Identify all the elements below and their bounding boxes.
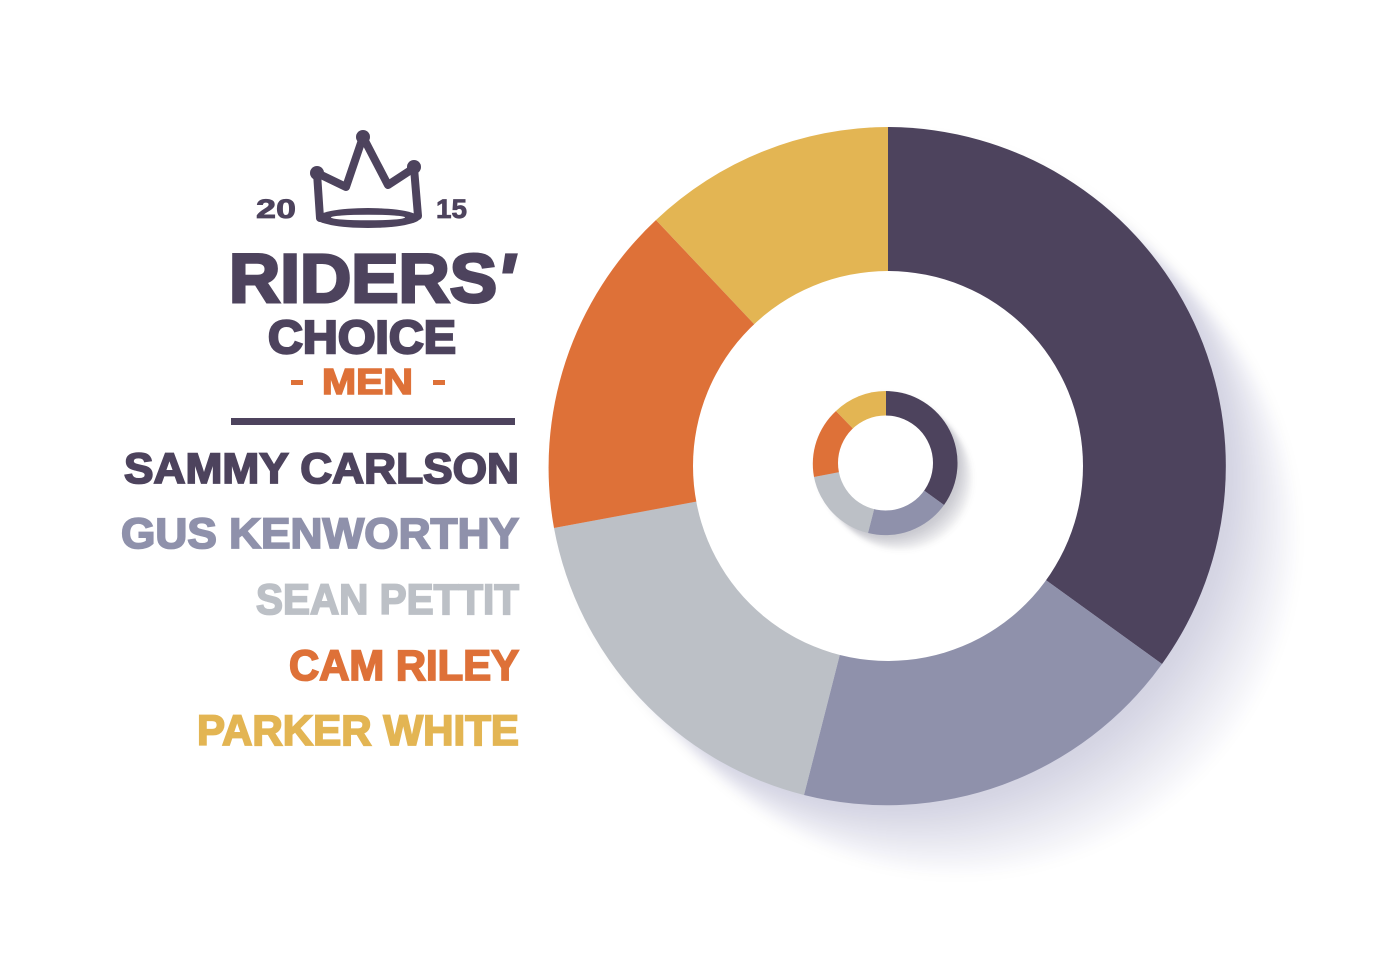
dash right [433,380,445,385]
name: Parker White: PARKER WHITE [197,707,519,755]
small segment: Gus Kenworthy [868,463,944,535]
small segment: Sean Pettit [814,463,886,533]
heading: RIDERS': RIDERS' [229,240,517,317]
legend names [121,445,519,755]
dash left [291,380,303,385]
segment: Sammy Carlson [888,127,1226,664]
segment: Sean Pettit [554,466,888,795]
segment: Cam Riley [549,220,888,528]
name: Sammy Carlson: SAMMY CARLSON [124,445,519,493]
small donut shadow [815,393,973,551]
subheading: MEN: MEN [322,361,413,402]
name: Sean Pettit: SEAN PETTIT [256,576,519,624]
year left: 20: 20 [256,194,296,224]
icon: crown [310,130,421,228]
segment: Gus Kenworthy [804,466,1162,805]
small donut hole [838,416,933,510]
name: Cam Riley: CAM RILEY [289,642,519,690]
large donut drop shadow [554,132,1297,875]
large donut hole [693,271,1083,661]
divider rule [231,418,515,425]
year right: 15: 15 [436,194,467,224]
segment: Parker White [656,127,888,466]
name: Gus Kenworthy: GUS KENWORTHY [121,510,519,558]
small segment: Cam Riley [813,411,886,477]
small donut chart [813,391,958,535]
small segment: Parker White [836,391,886,463]
small segment: Sammy Carlson [886,391,958,505]
large donut chart [549,127,1226,805]
heading: CHOICE: CHOICE [268,311,456,363]
